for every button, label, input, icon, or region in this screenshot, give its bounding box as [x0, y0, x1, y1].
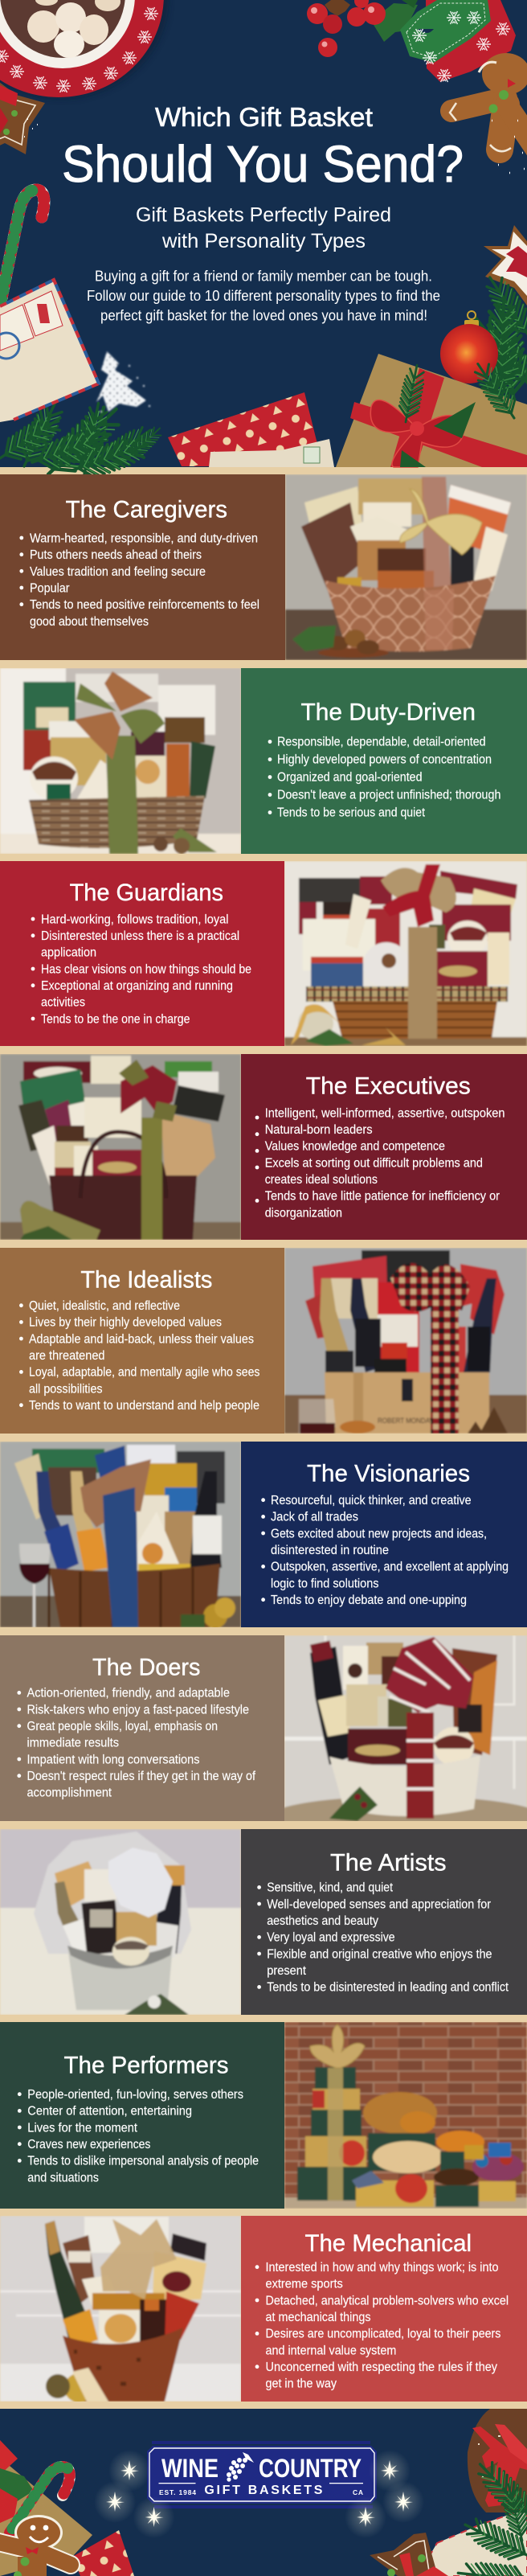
- heading: the caregivers: The Caregivers: [66, 496, 227, 523]
- panel: the duty-driven: [0, 668, 527, 854]
- bullet list: performers: People-oriented, fun-loving, serves others: [27, 2088, 243, 2102]
- bullet list: duty-driven: Organized and goal-oriented: [277, 771, 423, 785]
- icon: candy cane: [0, 190, 44, 306]
- heading: the duty-driven: The Duty-Driven: [300, 699, 476, 726]
- heading: the performers: The Performers: [64, 2052, 228, 2078]
- bullet list: caregivers: [19, 532, 259, 629]
- bullet list: performers: Lives for the moment: [27, 2121, 138, 2135]
- heading: the guardians: The Guardians: [70, 880, 223, 906]
- heading: the artists: The Artists: [330, 1850, 447, 1877]
- bullet list: artists: aesthetics and beauty: [267, 1914, 378, 1928]
- bullet list: mechanical: and internal value system: [265, 2344, 396, 2357]
- bullet list: executives: Natural-born leaders: [265, 1123, 373, 1137]
- bullet list: artists: Well-developed senses and appreciation for: [267, 1897, 492, 1911]
- icon: wrapped gift box: [336, 354, 527, 467]
- bullet list: duty-driven: Doesn't leave a project unfinished; thorough: [277, 789, 500, 802]
- panel: the doers: [0, 1635, 527, 1838]
- bullet list: mechanical: [255, 2261, 509, 2391]
- bullet list: artists: present: [267, 1964, 307, 1978]
- bullet list: idealists: Tends to want to understand and help people: [29, 1399, 259, 1413]
- bullet list: caregivers: Popular: [30, 582, 70, 595]
- icon: glowing stars: [94, 2450, 424, 2538]
- photo: rustic pot with champagne: [0, 2216, 241, 2402]
- intro paragraph: perfect gift basket for the loved ones you have in mind!: [100, 307, 427, 323]
- bullet list: visionaries: Gets excited about new projects and ideas,: [271, 1527, 487, 1540]
- logo: wine country gift baskets: CA: [353, 2488, 363, 2496]
- bullet list: visionaries: Tends to enjoy debate and one-upping: [271, 1594, 467, 1607]
- panel: the mechanical: [0, 2216, 527, 2402]
- bullet list: idealists: [19, 1299, 259, 1413]
- footer panel: [0, 2409, 527, 2576]
- logo: wine country gift baskets: GIFT BASKETS: [204, 2484, 323, 2497]
- heading: the idealists: The Idealists: [80, 1267, 212, 1294]
- icon: envelope right: [418, 2508, 527, 2576]
- bullet list: executives: Intelligent, well-informed, assertive, outspoken: [265, 1106, 505, 1120]
- logo: wine country gift baskets: COUNTRY: [259, 2454, 362, 2483]
- bullet list: caregivers: Warm-hearted, responsible, and duty-driven: [30, 532, 258, 545]
- bullet list: idealists: Adaptable and laid-back, unless their values: [29, 1332, 254, 1346]
- bullet list: idealists: are threatened: [29, 1349, 104, 1363]
- title: should you send: Should You Send?: [62, 135, 464, 193]
- bullet list: artists: Very loyal and expressive: [267, 1931, 395, 1945]
- icon: cocoa mug on red plate: [0, 0, 169, 99]
- icon: gingerbread man left: [0, 2515, 71, 2576]
- bullet list: performers: [18, 2088, 259, 2184]
- bullet list: doers: Risk-takers who enjoy a fast-paced lifestyle: [27, 1703, 249, 1717]
- bullet list: performers: Center of attention, entertaining: [27, 2105, 192, 2119]
- photo: leather tote basket: [0, 1054, 241, 1240]
- panel: the artists: [0, 1829, 527, 2015]
- bullet list: artists: Sensitive, kind, and quiet: [267, 1881, 393, 1895]
- bullet list: mechanical: Desires are uncomplicated, loyal to their peers: [265, 2328, 500, 2341]
- bullet list: guardians: Disinterested unless there is a practical: [41, 929, 239, 943]
- icon: patterned red paper: [72, 2530, 134, 2576]
- icon: pine branches footer: [456, 2454, 527, 2576]
- bullet list: caregivers: Values tradition and feeling secure: [30, 565, 206, 579]
- photo: gift tower on brick: [284, 2022, 527, 2209]
- bullet list: executives: disorganization: [265, 1206, 342, 1220]
- bullet list: visionaries: disinterested in routine: [271, 1544, 389, 1557]
- bullet list: mechanical: Interested in how and why things work; is into: [265, 2261, 499, 2275]
- logo: wine country gift baskets: EST. 1984: [159, 2488, 196, 2496]
- panel: the idealists: [0, 1248, 527, 1434]
- bullet list: guardians: activities: [41, 996, 85, 1010]
- panel: the executives: [0, 1054, 527, 1240]
- title: which gift basket: Which Gift Basket: [155, 102, 373, 132]
- logo: wine country gift baskets: WINE: [161, 2454, 219, 2483]
- bullet list: doers: Action-oriented, friendly, and adaptable: [27, 1687, 230, 1700]
- bullet list: guardians: Exceptional at organizing and running: [41, 979, 233, 993]
- bullet list: duty-driven: [268, 736, 500, 820]
- bullet list: guardians: application: [41, 946, 96, 960]
- bullet list: doers: immediate results: [27, 1737, 119, 1750]
- icon: star cookie right: [484, 225, 527, 306]
- bullet list: executives: [255, 1106, 505, 1220]
- bullet list: duty-driven: Highly developed powers of concentration: [277, 753, 492, 767]
- bullet list: mechanical: get in the way: [265, 2377, 337, 2391]
- icon: star cookie left: [0, 74, 45, 154]
- bullet list: guardians: Tends to be the one in charge: [41, 1012, 190, 1026]
- bullet list: executives: Values knowledge and competence: [265, 1140, 445, 1154]
- heading: the executives: The Executives: [306, 1073, 471, 1100]
- panel: the visionaries: [0, 1442, 527, 1628]
- bullet list: artists: Flexible and original creative who enjoys the: [267, 1947, 492, 1961]
- intro paragraph: Follow our guide to 10 different personality types to find the: [87, 287, 440, 304]
- bullet list: caregivers: Puts others needs ahead of theirs: [30, 548, 202, 562]
- bullet list: caregivers: Tends to need positive reinforcements to feel: [30, 598, 259, 612]
- heading: the doers: The Doers: [92, 1654, 200, 1680]
- icon: holly berries: [307, 0, 419, 57]
- bullet list: executives: Tends to have little patience for inefficiency or: [265, 1190, 500, 1204]
- icon: pine branches right: [466, 269, 527, 424]
- bullet list: guardians: Has clear visions on how things should be: [41, 962, 251, 976]
- logo: wine country gift baskets: [147, 2441, 377, 2508]
- hero background panel: [0, 0, 527, 486]
- intro paragraph: [87, 267, 440, 323]
- icon: star cookie bottom: [370, 2533, 448, 2576]
- heading: the visionaries: The Visionaries: [307, 1461, 470, 1487]
- bullet list: doers: Impatient with long conversations: [27, 1753, 199, 1766]
- icon: grapes: [227, 2452, 254, 2482]
- photo: silver tissue basket: [0, 1829, 241, 2015]
- bullet list: guardians: [31, 913, 251, 1026]
- bullet list: idealists: all possibilities: [29, 1382, 103, 1396]
- photo: wine crate basket: [284, 1248, 527, 1434]
- bullet list: doers: [17, 1687, 255, 1800]
- subtitle line one: Gift Baskets Perfectly Paired: [136, 204, 391, 227]
- icon: cookie with red ribbon: [468, 2409, 527, 2512]
- icon: candy cane: [10, 2467, 70, 2533]
- icon: snow tree: [96, 351, 150, 412]
- bullet list: mechanical: Unconcerned with respecting the rules if they: [265, 2361, 497, 2374]
- bullet list: executives: creates ideal solutions: [265, 1173, 378, 1187]
- photo: coppola wine basket: [0, 1442, 241, 1627]
- panel: the caregivers: [0, 474, 527, 660]
- panel: the guardians: [0, 861, 527, 1046]
- bullet list: doers: Doesn't respect rules if they get in the way of: [27, 1770, 255, 1783]
- bullet list: visionaries: Jack of all trades: [271, 1511, 358, 1524]
- bullet list: mechanical: at mechanical things: [265, 2311, 371, 2324]
- bullet list: guardians: Hard-working, follows tradition, loyal: [41, 913, 228, 926]
- icon: red ornament: [440, 311, 498, 384]
- icon: gift box left: [0, 2440, 92, 2576]
- bullet list: executives: Excels at sorting out difficult problems and: [265, 1156, 483, 1170]
- bullet list: duty-driven: Responsible, dependable, detail-oriented: [277, 736, 486, 749]
- photo: hammered silver basket: [284, 1635, 527, 1821]
- bullet list: mechanical: extreme sports: [265, 2278, 343, 2291]
- bullet list: doers: Great people skills, loyal, emphasis on: [27, 1720, 218, 1733]
- bullet list: idealists: Loyal, adaptable, and mentally agile who sees: [29, 1366, 259, 1380]
- bullet list: visionaries: [261, 1494, 509, 1607]
- photo: plaid wood basket: [284, 861, 527, 1046]
- bullet list: performers: and situations: [27, 2171, 99, 2184]
- icon: patterned red card: [168, 392, 334, 467]
- photo: wicker basket with green ribbon: [0, 668, 241, 854]
- photo: copper basket: [285, 474, 527, 660]
- intro paragraph: Buying a gift for a friend or family member can be tough.: [95, 267, 432, 285]
- bullet list: duty-driven: Tends to be serious and quiet: [277, 806, 425, 820]
- bullet list: performers: Tends to dislike impersonal analysis of people: [27, 2155, 259, 2168]
- icon: felt mittens: [400, 0, 516, 82]
- bullet list: artists: [257, 1881, 509, 1995]
- icon: airmail envelope: [0, 280, 99, 422]
- bullet list: visionaries: Resourceful, quick thinker, and creative: [271, 1494, 472, 1507]
- panel: the performers: [0, 2022, 527, 2209]
- icon: gingerbread man right: [450, 53, 527, 173]
- bullet list: visionaries: logic to find solutions: [271, 1577, 379, 1590]
- bullet list: doers: accomplishment: [27, 1786, 112, 1800]
- bullet list: caregivers: good about themselves: [30, 615, 149, 629]
- subtitle line two: with Personality Types: [161, 230, 366, 252]
- bullet list: performers: Craves new experiences: [27, 2138, 150, 2151]
- icon: pine branches left: [0, 352, 166, 486]
- bullet list: idealists: Quiet, idealistic, and reflective: [29, 1299, 180, 1313]
- photo: wine crate basket: ROBERT MONDAVI: [378, 1417, 435, 1425]
- heading: the mechanical: The Mechanical: [305, 2230, 472, 2257]
- bullet list: idealists: Lives by their highly developed values: [29, 1316, 222, 1330]
